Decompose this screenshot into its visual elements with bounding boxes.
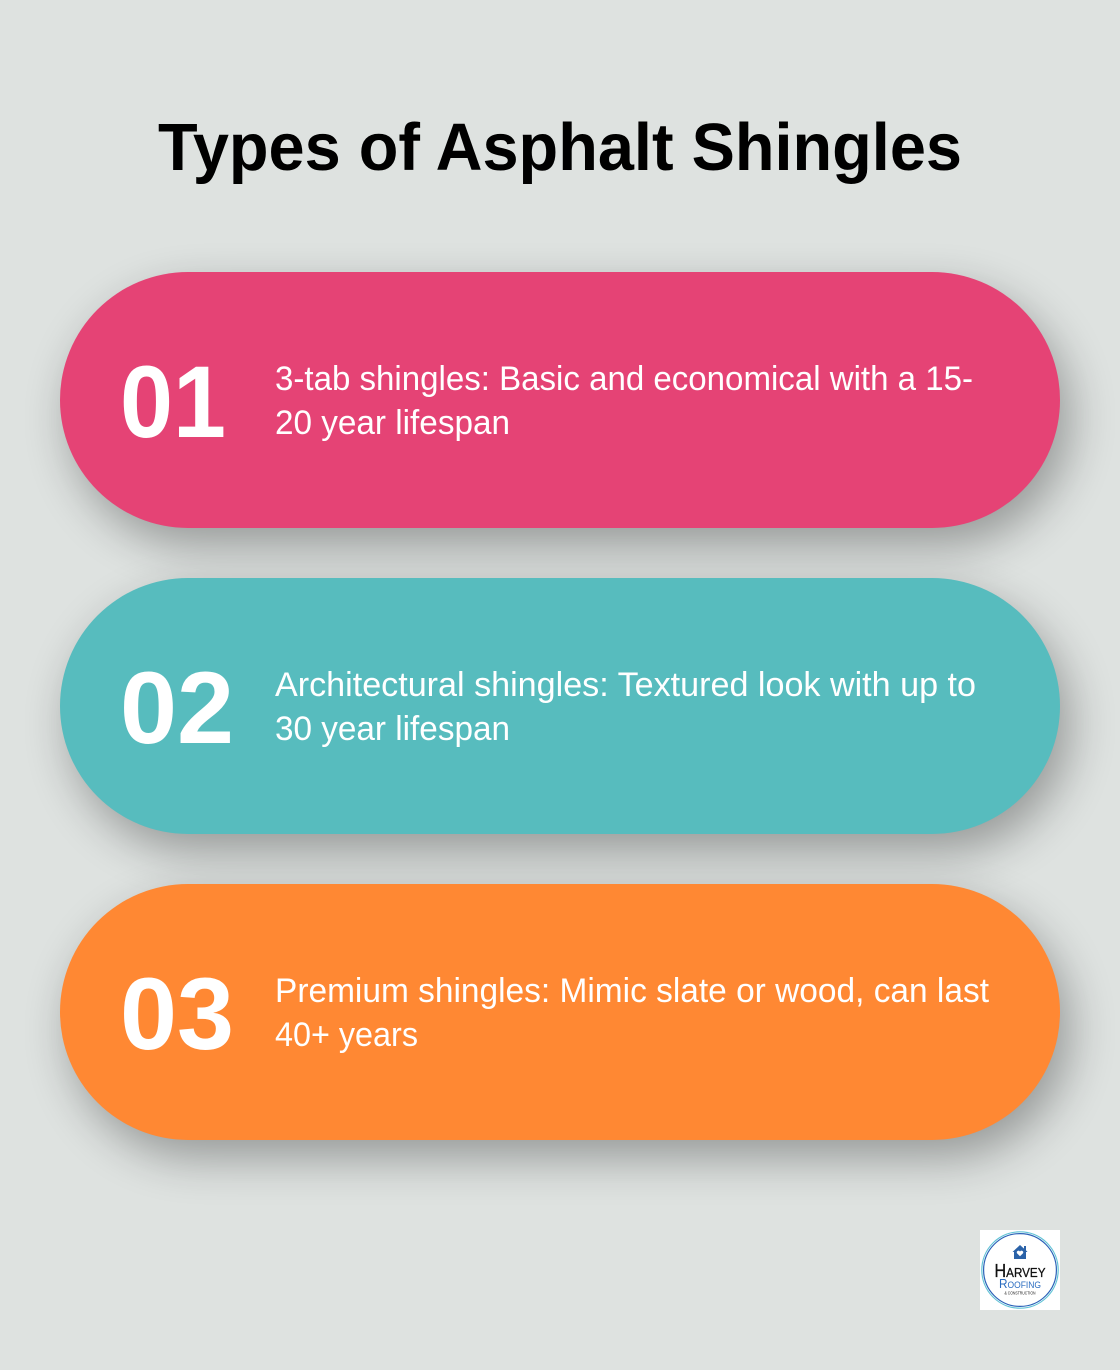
logo wordmark: & CONSTRUCTION <box>1004 1290 1036 1296</box>
description: architectural shingles <box>275 666 976 748</box>
number 02: 02 <box>120 651 234 765</box>
logo: Harvey Roofing <box>980 1230 1060 1310</box>
panel: premium shingles <box>60 884 1060 1140</box>
logo wordmark: Harvey <box>994 1261 1046 1281</box>
number 03: 03 <box>120 957 234 1071</box>
panel: 3-tab shingles <box>60 272 1060 528</box>
description: architectural shingles: 30 year lifespan <box>275 710 510 748</box>
description: premium shingles: 40+ years <box>275 1016 418 1054</box>
description: 3-tab shingles <box>275 360 973 442</box>
description: 3-tab shingles: 20 year lifespan <box>275 404 510 442</box>
description: architectural shingles: Architectural shingles: Textured look with up to <box>275 666 976 704</box>
logo wordmark: Roofing <box>999 1277 1041 1291</box>
icon: house with heart <box>1012 1245 1028 1259</box>
title: Types of Asphalt Shingles <box>158 110 962 185</box>
logo wordmark <box>994 1261 1046 1296</box>
panel: architectural shingles <box>60 578 1060 834</box>
description: premium shingles: Premium shingles: Mimic slate or wood, can last <box>275 972 990 1010</box>
description: 3-tab shingles: 3-tab shingles: Basic and economical with a 15- <box>275 360 973 398</box>
number 01: 01 <box>120 345 226 459</box>
description: premium shingles <box>275 972 990 1054</box>
